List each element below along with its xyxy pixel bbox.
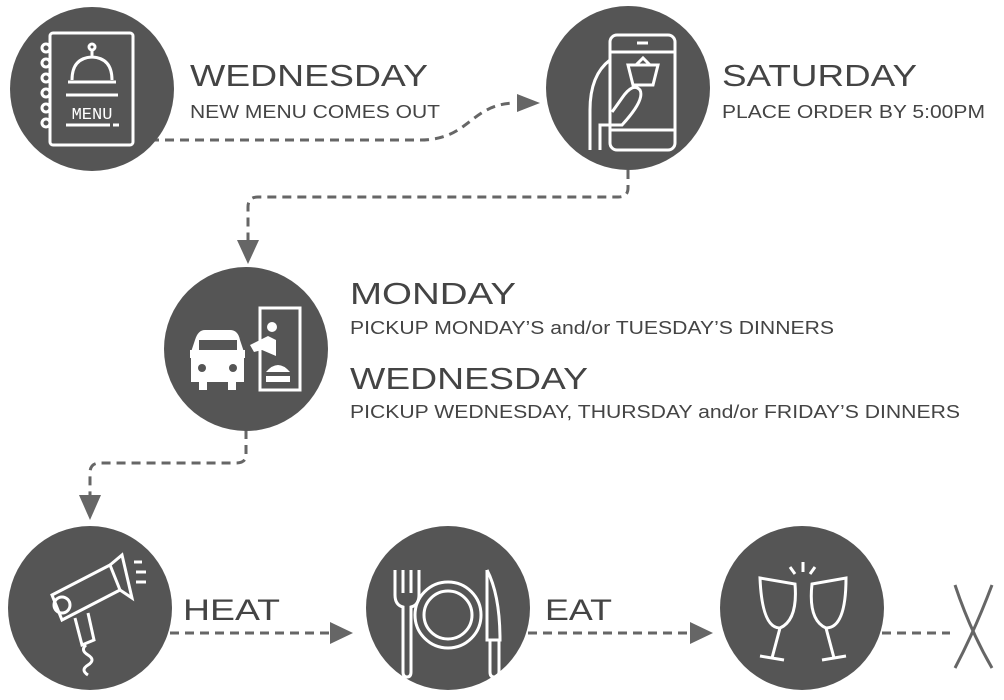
text: wednesday new menu: NEW MENU COMES OUT: [190, 102, 440, 122]
arrowhead: [330, 622, 353, 644]
text: saturday: PLACE ORDER BY 5:00PM: [722, 102, 985, 122]
arrowhead: [79, 495, 101, 520]
text: saturday: SATURDAY: [722, 58, 917, 93]
arrow: eat to cheers: [528, 632, 690, 634]
icon: phone in hand: [590, 35, 675, 150]
arrowhead: [237, 240, 259, 264]
text: monday / wednesday pickup: WEDNESDAY: [350, 361, 588, 396]
text: monday / wednesday pickup: PICKUP MONDAY’S and/or TUESDAY’S DINNERS: [350, 318, 834, 338]
text: heat: HEAT: [183, 594, 280, 627]
arrowhead: [517, 94, 540, 112]
circle: saturday order: [546, 6, 710, 170]
arrow: menu to saturday: [150, 103, 515, 140]
arrow: end line: [882, 632, 950, 634]
circle: menu: [10, 7, 174, 171]
icon: wine glasses toasting: [760, 562, 846, 660]
icon: hair dryer: [52, 555, 146, 675]
circle: pickup: [164, 267, 328, 431]
arrow: heat to eat: [170, 632, 330, 634]
icon: menu book: [42, 33, 133, 145]
icon: car at window: [190, 308, 300, 390]
text: eat: EAT: [545, 594, 612, 627]
arrowhead: [690, 622, 713, 644]
arrow: monday to heat: [90, 430, 246, 495]
text: wednesday new menu: WEDNESDAY: [190, 58, 428, 93]
circle: eat: [366, 526, 530, 690]
text: monday / wednesday pickup: PICKUP WEDNESDAY, THURSDAY and/or FRIDAY’S DINNERS: [350, 402, 960, 422]
circle: heat: [8, 526, 172, 690]
text: monday / wednesday pickup: [350, 276, 960, 422]
text: saturday: [722, 58, 985, 122]
circle: cheers: [720, 526, 884, 690]
text: wednesday new menu: [190, 58, 440, 122]
circle: menu: MENU: [72, 106, 112, 125]
icon: end X: [955, 585, 992, 668]
icon: plate fork knife: [395, 570, 500, 677]
text: monday / wednesday pickup: MONDAY: [350, 276, 516, 311]
arrow: saturday to monday: [248, 170, 628, 240]
